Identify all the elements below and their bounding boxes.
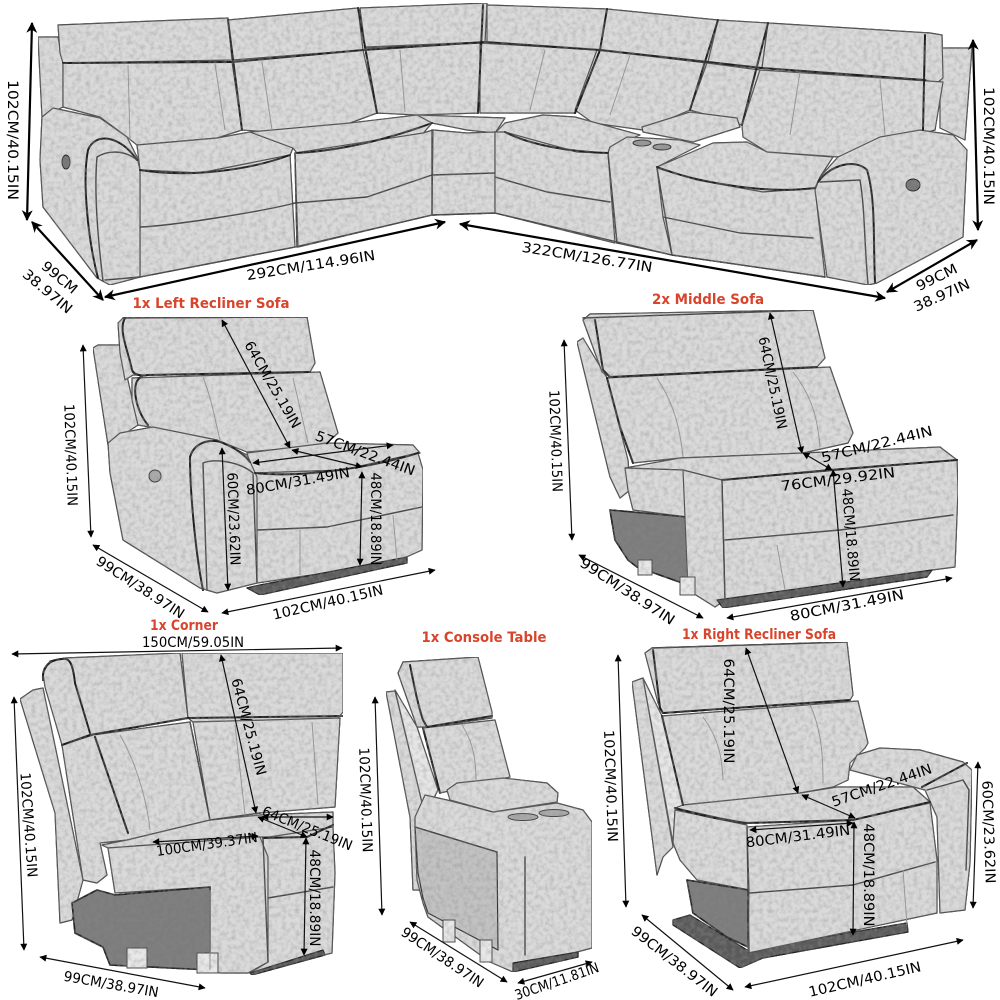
dims: corner: 150CM/59.05IN (142, 635, 244, 651)
full sectional sofa (38, 3, 972, 285)
dims: corner: 64CM/25.19IN (259, 804, 355, 854)
dims: middle sofa: 80CM/31.49IN (789, 587, 905, 625)
dims: middle sofa: 64CM/25.19IN (754, 335, 790, 431)
dims: middle sofa: 48CM/18.89IN (838, 488, 862, 582)
title: middle sofa: 2x Middle Sofa (652, 292, 764, 308)
dims: corner (12, 635, 355, 1000)
dims: console table (355, 697, 601, 1000)
dims: corner: 64CM/25.19IN (227, 677, 269, 777)
dimension: left run width: 292CM/114.96IN (246, 248, 376, 284)
dims: console table: 102CM/40.15IN (355, 747, 375, 853)
left recliner sofa (93, 317, 423, 595)
title: console table: 1x Console Table (422, 630, 547, 646)
right recliner sofa (632, 642, 972, 968)
dimension: left run width (105, 222, 445, 297)
dims: left recliner: 80CM/31.49IN (245, 465, 351, 499)
corner sofa (20, 653, 343, 975)
dims: corner: 100CM/39.37IN (155, 830, 259, 860)
dims: left recliner: 48CM/18.89IN (367, 472, 383, 566)
dimension: right run width: 322CM/126.77IN (521, 240, 653, 276)
dimension: overall depth right (887, 240, 977, 316)
dimension: overall depth left: 99CM (38, 258, 80, 298)
dims: left recliner: 102CM/40.15IN (60, 404, 80, 506)
dimension: overall height left: 102CM/40.15IN (4, 80, 20, 200)
dims: middle sofa: 57CM/22.44IN (820, 423, 934, 467)
title: corner: 1x Corner (150, 618, 219, 634)
dimension: overall depth right: 38.97IN (911, 276, 973, 316)
dims: right recliner (600, 648, 998, 1000)
dims: left recliner: 102CM/40.15IN (271, 582, 385, 624)
dims: middle sofa: 76CM/29.92IN (780, 465, 896, 495)
dimension: overall depth left (19, 222, 103, 317)
dims: right recliner: 48CM/18.89IN (860, 824, 876, 926)
dims: left recliner: 60CM/23.62IN (223, 472, 243, 566)
dims: middle sofa (545, 313, 952, 629)
dims: left recliner: 57CM/22.44IN (313, 429, 417, 479)
dims: corner: 102CM/40.15IN (16, 772, 40, 878)
dims: right recliner: 102CM/40.15IN (807, 959, 923, 1000)
dims: console table: 99CM/38.97IN (398, 925, 486, 991)
dims: left recliner: 99CM/38.97IN (93, 554, 187, 622)
dims: right recliner: 60CM/23.62IN (978, 780, 998, 884)
dimension: overall height right: 102CM/40.15IN (980, 87, 996, 205)
dims: right recliner: 102CM/40.15IN (600, 730, 620, 842)
dimension: overall depth right: 99CM (914, 261, 960, 295)
title: left recliner: 1x Left Recliner Sofa (132, 296, 290, 312)
dims: right recliner: 80CM/31.49IN (745, 823, 851, 851)
title: right recliner: 1x Right Recliner Sofa (682, 627, 836, 643)
dims: right recliner: 99CM/38.97IN (628, 923, 720, 1000)
console table (386, 657, 592, 972)
dims: corner: 48CM/18.89IN (306, 850, 322, 946)
dims: right recliner: 64CM/25.19IN (720, 658, 736, 764)
dims: middle sofa: 102CM/40.15IN (545, 390, 565, 492)
dims: left recliner (60, 320, 435, 624)
dimension: overall height left (4, 23, 32, 220)
dimension: overall depth left: 38.97IN (19, 267, 75, 317)
dimension: right run width (460, 224, 885, 298)
dims: left recliner: 64CM/25.19IN (241, 339, 303, 431)
dims: right recliner: 57CM/22.44IN (830, 761, 934, 811)
dimension: overall height right (973, 40, 996, 230)
dims: middle sofa: 99CM/38.97IN (577, 555, 677, 629)
middle sofa (577, 310, 958, 608)
